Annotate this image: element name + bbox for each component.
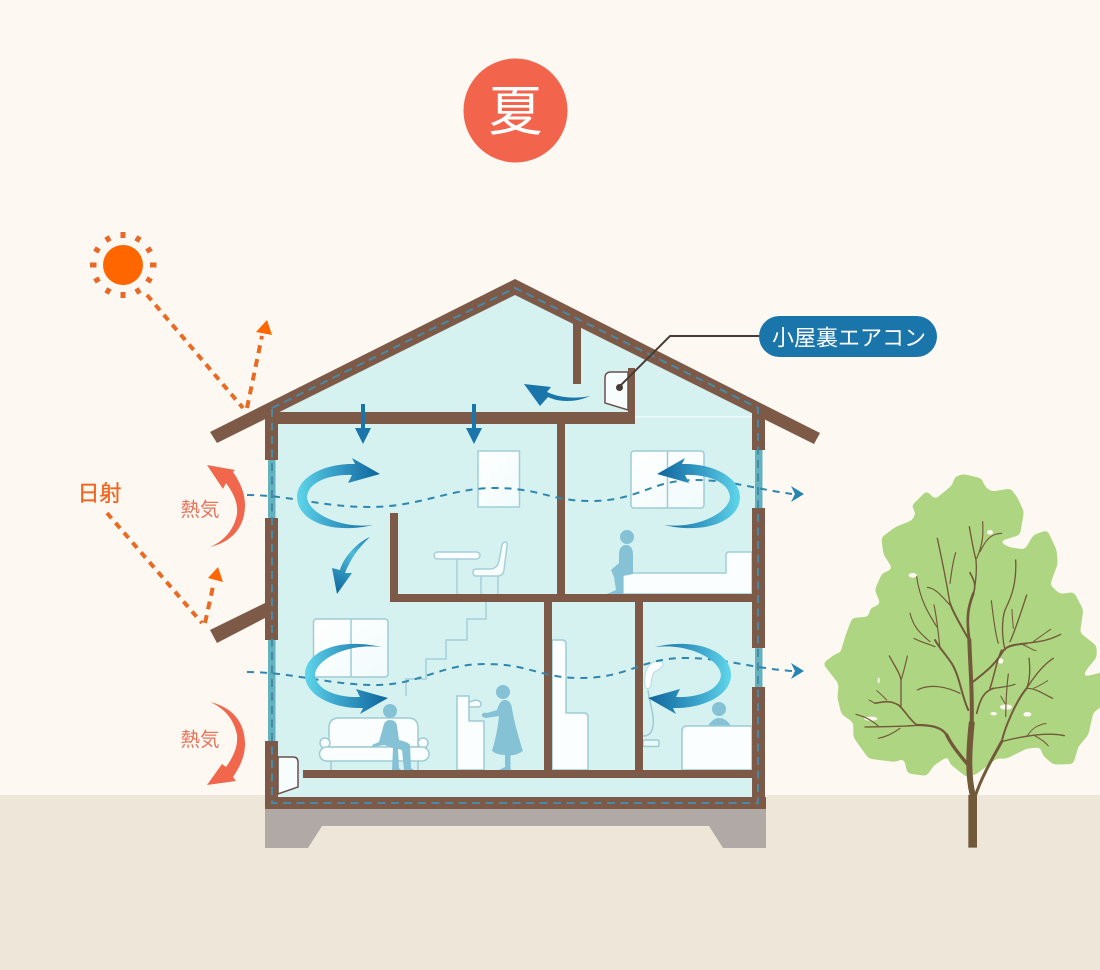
swirl arrow: upper left xyxy=(297,458,380,528)
wall: lower right xyxy=(635,602,643,772)
person: bathing xyxy=(708,702,731,726)
right wall lower xyxy=(752,687,765,809)
ground floor xyxy=(303,770,753,778)
stair line xyxy=(406,602,486,696)
bed xyxy=(623,552,752,594)
wall: lower center xyxy=(544,602,552,772)
callout: attic air conditioner xyxy=(759,316,937,357)
airflow: upper xyxy=(247,480,804,507)
heat arrow lower xyxy=(207,702,245,785)
arrow: sunlight reflected at the roof xyxy=(147,295,272,408)
right wall upper xyxy=(752,410,765,450)
season badge: 夏 xyxy=(488,82,542,142)
arrow: ceiling vent one xyxy=(355,404,371,444)
washstand xyxy=(457,696,484,770)
foundation xyxy=(265,809,766,848)
person: standing woman xyxy=(482,685,523,770)
airflow: lower xyxy=(247,658,804,685)
heat arrow upper xyxy=(207,465,245,547)
season badge xyxy=(464,58,568,162)
heat label lower: 熱気 xyxy=(180,729,220,751)
upper room window xyxy=(478,451,520,507)
thin attic ceiling line xyxy=(635,416,753,418)
tree xyxy=(823,474,1100,848)
glass: lower right xyxy=(755,648,762,687)
shower xyxy=(643,661,663,746)
attic wall xyxy=(628,368,635,424)
callout leader line xyxy=(616,336,760,391)
callout: attic air conditioner: 小屋裏エアコン xyxy=(772,326,926,350)
swirl arrow: lower right xyxy=(648,644,731,714)
tree canopy xyxy=(823,474,1100,777)
washroom fixture xyxy=(552,640,588,770)
insulation dashed line xyxy=(272,288,758,803)
second floor xyxy=(390,594,753,602)
attic air conditioner unit xyxy=(605,372,628,410)
arrow: ceiling vent two xyxy=(466,404,482,444)
arrow: sunlight reflected at the lower eave xyxy=(107,513,223,623)
bottom slab xyxy=(265,797,766,809)
sofa xyxy=(320,718,429,770)
floor air conditioner unit xyxy=(278,757,298,794)
icon: sun xyxy=(90,232,156,298)
living room window xyxy=(314,619,388,677)
left wall middle xyxy=(265,518,278,640)
left wall lower xyxy=(265,741,278,809)
person: seated on sofa xyxy=(372,704,414,770)
table and chair xyxy=(434,542,507,594)
house interior xyxy=(270,290,760,802)
house structure xyxy=(210,279,820,809)
wall: upper partition xyxy=(390,513,398,598)
lower eave xyxy=(210,603,265,643)
glass: upper left xyxy=(268,460,276,518)
swirl arrow: lower left xyxy=(305,644,388,714)
arrow: attic air conditioner outflow xyxy=(524,384,590,406)
bedroom window xyxy=(631,451,704,508)
left wall upper xyxy=(265,410,278,460)
glass: lower left xyxy=(268,640,276,741)
tree trunk and branches xyxy=(856,522,1064,848)
swirl arrow: upper right xyxy=(657,458,740,528)
hanging attic wall xyxy=(573,320,581,384)
label: solar radiation: 日射 xyxy=(77,481,122,506)
wall: upper center xyxy=(557,424,565,596)
glass: upper right xyxy=(755,450,762,508)
canopy gaps xyxy=(864,530,1031,721)
roof xyxy=(210,279,820,444)
right wall middle xyxy=(752,508,765,648)
ground xyxy=(0,795,1100,970)
attic floor xyxy=(277,412,635,424)
heat label upper: 熱気 xyxy=(180,499,220,521)
arrow: downward flow between floors xyxy=(332,537,370,594)
person: seated on bed xyxy=(607,530,634,594)
bathtub xyxy=(682,726,752,770)
